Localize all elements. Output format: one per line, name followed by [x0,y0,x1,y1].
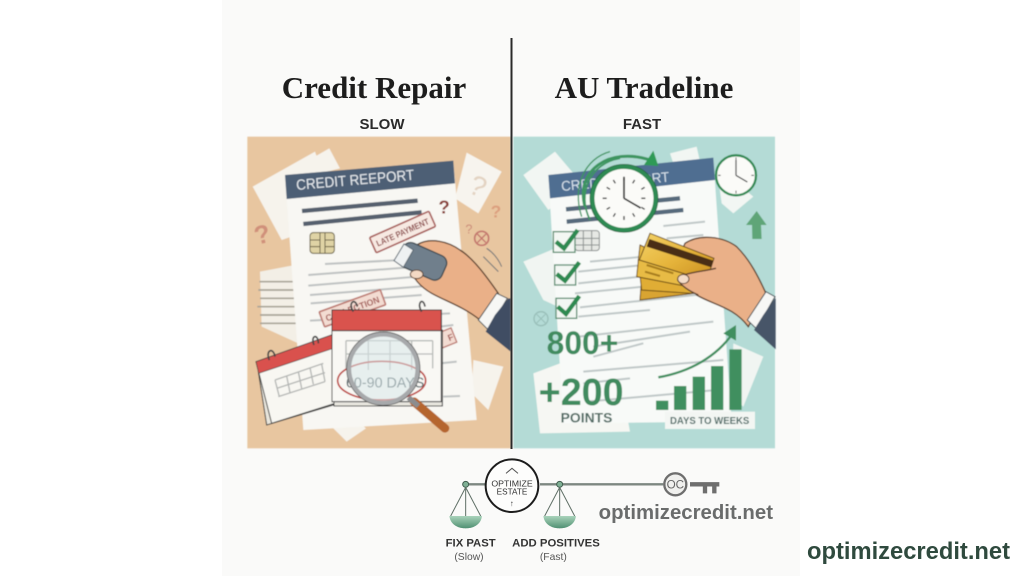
subtitle: SLOW: SLOW [360,116,405,133]
label: fix past: (Slow) [454,552,484,563]
gold credit cards [637,233,714,300]
question marks: ? [465,222,472,236]
thumb over cards [678,268,730,300]
logo badge: optimize estate: OPTIMIZE [491,478,533,488]
logo badge: optimize estate [486,459,538,512]
checklist [553,230,579,318]
title: Credit Repair: Credit Repair [282,70,466,105]
question marks: ? [251,218,274,251]
stack of papers [257,265,298,343]
question marks [251,196,501,251]
magnifying glass [347,332,445,428]
left scale [449,481,482,528]
stat: +200 points: +200 [539,371,624,413]
question marks: ? [491,201,501,221]
credit report sheet: CREDIT REEPORT [296,168,415,194]
large clock [590,164,658,232]
label: add positives: ADD POSITIVES [512,537,600,549]
logo badge: optimize estate: ↑ [510,499,514,508]
label: add positives: (Fast) [540,552,567,563]
small clock [716,155,756,195]
x circle mark [534,312,548,326]
label: fix past: FIX PAST [446,537,496,549]
stat: +200 points: POINTS [561,410,612,426]
circular arrows [578,151,658,220]
right scale [543,481,576,528]
stamp: late payment: LATE PAYMENT [375,216,431,248]
credit report sheet [548,158,732,423]
panel: AU tradeline illustration [513,137,776,448]
key icon [664,473,719,495]
stamp: collection [319,290,386,327]
label: add positives [512,537,600,563]
watermark: optimizecredit.net: optimizecredit.net [807,539,1010,565]
question marks: ? [438,196,450,217]
website label: optimizecredit.net [599,502,773,524]
large calendar with 60-90 days: 60-90 DAYS [346,375,425,391]
loose papers behind report [523,147,763,433]
hand with eraser [394,240,511,352]
title: AU Tradeline: AU Tradeline [555,70,733,105]
loose papers behind report [253,148,503,442]
hand behind cards [677,237,776,349]
key icon: OC [667,479,684,492]
small calendar [256,335,335,425]
stamp: collection: COLLECTION [324,295,381,323]
beam [465,481,663,488]
bar chart with growth arrow [656,325,742,410]
stamp fragment: F [446,332,456,343]
stat: 800+: 800+ [547,325,618,361]
chip icon [575,231,599,251]
logo badge: optimize estate: ESTATE [497,487,528,497]
credit report sheet: CREDIT REPORT [561,169,670,194]
loose papers behind report: ? [464,169,492,205]
center divider [510,38,512,449]
label: days to weeks [665,412,755,429]
footer graphic: balance and key [446,459,773,563]
large calendar with 60-90 days [332,301,442,406]
chip icon [310,233,334,253]
up arrow [746,211,767,239]
panel: credit repair illustration [247,137,511,448]
label: fix past [446,537,496,563]
credit report sheet [285,161,477,430]
label: days to weeks: DAYS TO WEEKS [670,416,750,427]
stamp fragment [428,328,457,351]
subtitle: FAST: FAST [623,116,661,133]
